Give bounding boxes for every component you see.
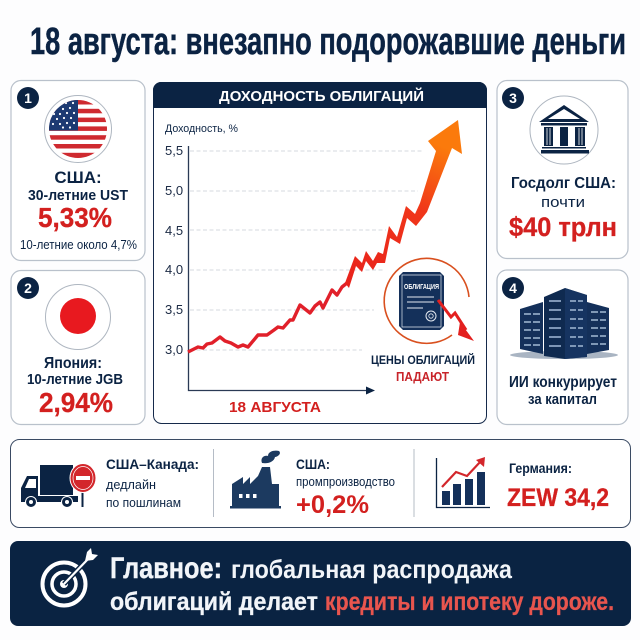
axis title: Доходность, % [165,123,238,135]
text: Germany ZEW [507,460,609,512]
icon: badge 1 [17,87,39,109]
text: takeaway: Главное: [110,552,222,585]
panel: bond yield chart [153,82,487,424]
text: US industrial output [296,456,395,519]
panel: AI [497,270,628,424]
icon: truck with stop sign [21,464,96,508]
icon: badge 3: 3 [509,90,517,106]
icon: badge 1: 1 [24,90,32,106]
icon: rising bar chart [436,457,490,508]
text: Japan: 2,94% [39,387,113,418]
text: tariff deadline: дедлайн [106,477,156,492]
text: US debt: $40 трлн [509,212,617,242]
text: tariff deadline [106,456,199,510]
text: AI [509,374,617,408]
text: Germany ZEW: Германия: [509,460,572,476]
text: takeaway: глобальная распродажа [231,554,512,584]
text: US debt: почти [541,195,585,211]
text: Japan [27,355,123,418]
panel: USA [11,80,145,260]
icon: badge 4 [502,277,524,299]
icon: US flag [44,96,112,162]
text: USA: 10-летние около 4,7% [20,238,137,252]
y axis labels: 5,5 [165,143,183,158]
text: USA: 30-летние UST [28,187,128,204]
panel: key takeaway banner [10,541,631,626]
icon: badge 2: 2 [24,280,32,296]
callout: bond prices fall [371,352,475,384]
text: takeaway [110,552,614,616]
callout: bond prices fall: ПАДАЮТ [396,370,449,384]
text: Japan: 10-летние JGB [27,371,123,388]
text: AI: ИИ конкурирует [509,374,617,391]
y axis labels: 3,0 [165,342,183,357]
icon: data centre servers [510,288,618,359]
text: tariff deadline: по пошлинам [106,495,181,510]
text: AI: за капитал [528,392,597,408]
text: Germany ZEW: ZEW 34,2 [507,484,609,512]
chart header: ДОХОДНОСТЬ ОБЛИГАЦИЙ [219,87,424,105]
y axis labels: 3,5 [165,302,183,317]
text: US industrial output: промпроизводство [296,475,395,489]
icon: falling bond: ОБЛИГАЦИЯ [404,284,439,291]
text: takeaway: облигаций делает [110,588,318,616]
text: tariff deadline: США–Канада: [106,456,199,472]
text: USA [20,168,137,252]
y axis labels: 5,0 [165,183,183,198]
icon: government building [530,96,598,164]
y axis labels: 4,5 [165,223,183,238]
text: US industrial output: +0,2% [296,491,369,519]
yield line with arrow [188,120,462,352]
text: USA: 5,33% [38,202,112,233]
chart header [153,82,487,108]
text: Japan: Япония: [44,355,102,372]
icon: badge 2 [17,277,39,299]
y axis labels [165,143,183,357]
panel: US debt [497,80,628,258]
text: US industrial output: США: [296,456,330,472]
callout: bond prices fall: ЦЕНЫ ОБЛИГАЦИЙ [371,352,475,367]
text: US debt [509,175,617,242]
icon: target with arrow [42,548,98,606]
icon: falling bond [384,258,474,343]
y axis labels: 4,0 [165,262,183,277]
icon: factory [230,451,281,508]
icon: Japanese flag [46,284,110,350]
text: USA: США: [54,168,102,187]
panel: macro strip [10,440,630,528]
icon: badge 3 [502,87,524,109]
panel: Japan [11,270,145,424]
date label: 18 АВГУСТА [229,399,321,416]
text: US debt: Госдолг США: [511,175,616,192]
chart axes [188,146,375,394]
icon: badge 4: 4 [509,280,517,296]
